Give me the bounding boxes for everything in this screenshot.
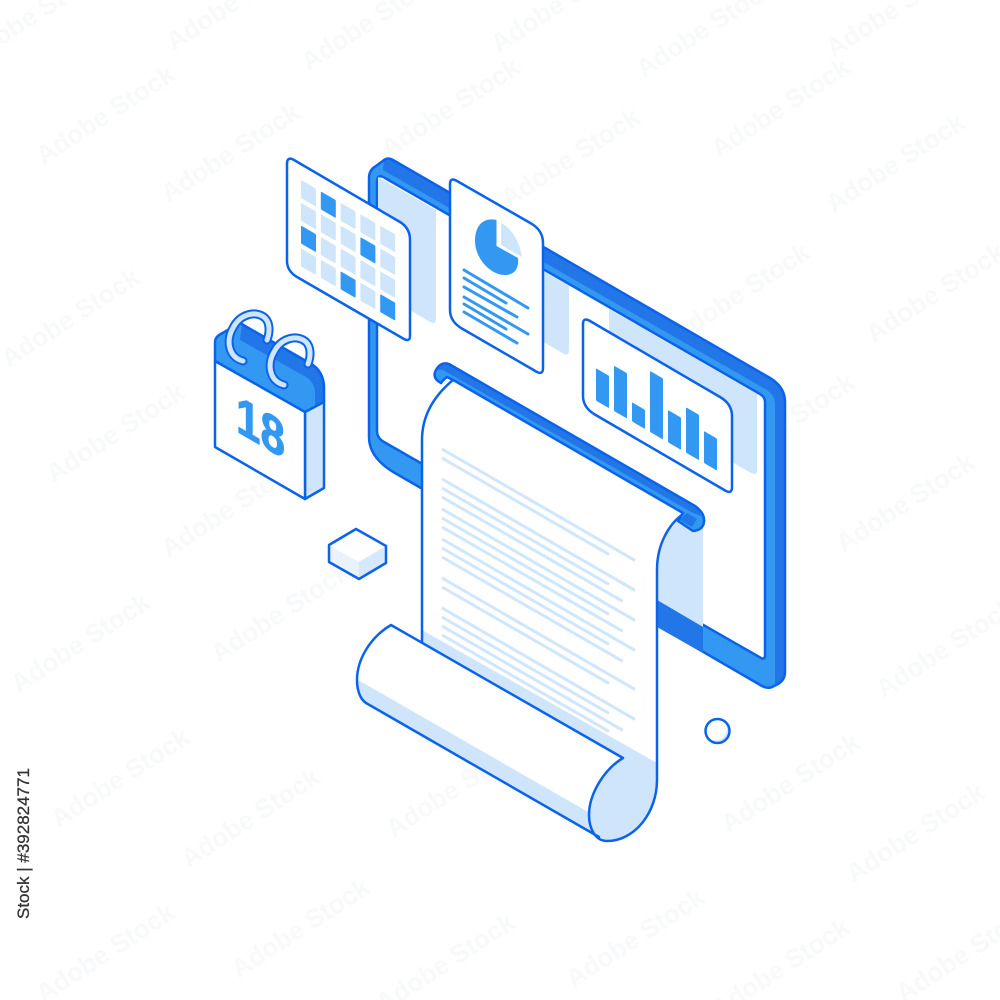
roller outline xyxy=(435,363,704,531)
watermark pattern: Adobe Stock xyxy=(30,58,180,170)
stock id side text: Stock | #392824771 xyxy=(14,768,33,919)
watermark pattern: Adobe Stock xyxy=(715,726,865,838)
watermark pattern: Adobe Stock xyxy=(665,236,815,348)
cube left face xyxy=(329,545,359,579)
calendar header xyxy=(215,323,324,412)
watermark pattern: Adobe Stock xyxy=(155,96,305,208)
watermark pattern: Adobe Stock xyxy=(205,556,355,668)
roll shade xyxy=(358,680,597,835)
binder ring right xyxy=(270,338,310,385)
document background xyxy=(450,180,543,373)
calendar date number: 18 xyxy=(236,383,285,470)
watermark pattern: Adobe Stock xyxy=(375,51,525,163)
calendar front page xyxy=(215,361,305,499)
watermark pattern: Adobe Stock xyxy=(840,776,990,888)
roller cast shadow on screen xyxy=(657,515,703,627)
watermark pattern: Adobe Stock xyxy=(40,376,190,488)
card date cells xyxy=(301,180,395,321)
cube top face xyxy=(329,529,386,562)
roller end cap dark xyxy=(680,513,697,527)
monitor dark edge xyxy=(383,158,785,686)
watermark pattern: Adobe Stock xyxy=(380,731,530,843)
monitor outline xyxy=(369,158,785,688)
cube outline xyxy=(329,529,386,579)
binder ring left xyxy=(229,314,269,361)
monitor frame xyxy=(369,158,785,688)
watermark pattern: Adobe Stock xyxy=(705,51,855,163)
small circle xyxy=(704,718,730,743)
pie chart main slice xyxy=(475,219,518,275)
watermark pattern: Adobe Stock xyxy=(155,451,305,563)
calendar side face xyxy=(305,401,324,499)
watermark pattern: Adobe Stock xyxy=(45,721,195,833)
paper shadow band xyxy=(422,630,657,780)
document text lines xyxy=(464,270,528,343)
screen shadow panel middle xyxy=(540,269,569,354)
paper text lines xyxy=(442,449,635,731)
printer roller xyxy=(435,363,704,531)
screen shadow panel left xyxy=(378,177,436,323)
monitor screen xyxy=(377,176,765,659)
monitor xyxy=(369,158,785,688)
watermark pattern: Adobe Stock xyxy=(560,881,710,993)
pie chart light slice xyxy=(501,223,522,257)
roller dark top xyxy=(437,363,704,517)
paper sheet xyxy=(422,380,683,841)
watermark pattern: Adobe Stock xyxy=(175,761,325,873)
watermark pattern: Adobe Stock xyxy=(5,586,155,698)
watermark pattern: Adobe Stock xyxy=(495,101,645,213)
calendar header outline xyxy=(215,323,324,412)
cube right face xyxy=(359,546,386,579)
watermark pattern: Adobe Stock xyxy=(820,106,970,218)
roller body xyxy=(435,363,704,531)
roller cast shadow on frame xyxy=(657,600,703,653)
roll body xyxy=(357,625,623,835)
watermark pattern: Adobe Stock xyxy=(830,446,980,558)
watermark pattern: Adobe Stock xyxy=(225,871,375,983)
watermark pattern: Adobe Stock xyxy=(710,366,860,478)
small cube xyxy=(329,529,386,579)
chart background xyxy=(583,320,732,492)
paper scroll xyxy=(357,380,683,841)
screen shadow panel right xyxy=(609,309,757,474)
report document card xyxy=(450,180,543,373)
wall calendar xyxy=(215,314,324,499)
chart bars xyxy=(596,340,717,471)
calendar card xyxy=(287,159,410,340)
calendar header dark side xyxy=(240,324,324,406)
card background xyxy=(287,159,410,340)
bar chart card xyxy=(583,320,732,492)
roll curl face xyxy=(589,758,657,841)
paper outline xyxy=(357,380,683,841)
